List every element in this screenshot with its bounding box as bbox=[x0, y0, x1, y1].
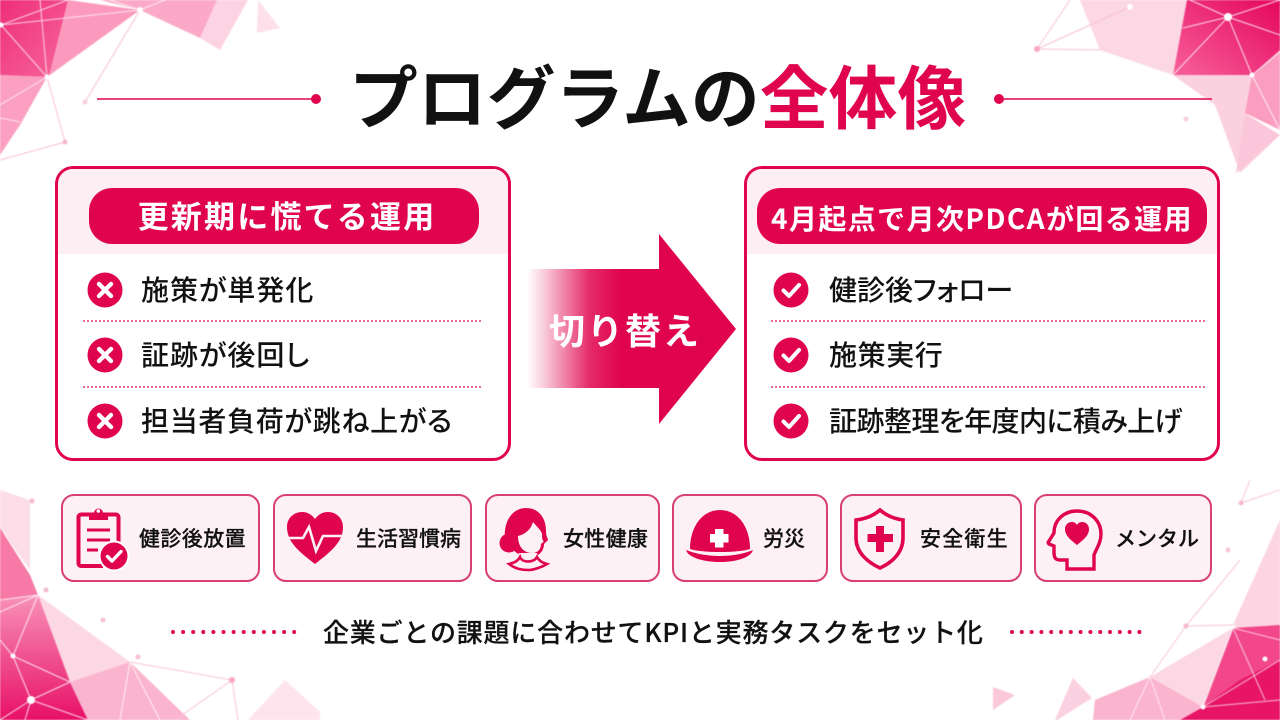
heading: before: 更新期に慌てる運用 bbox=[138, 200, 436, 235]
item: 健診後フォロー bbox=[774, 272, 1013, 308]
icon: hard hat bbox=[686, 510, 753, 562]
panel: before bbox=[55, 166, 511, 461]
arrow label: 切り替え bbox=[549, 311, 701, 352]
label: メンタル: メンタル bbox=[1115, 528, 1199, 551]
label: 労災: 労災 bbox=[763, 528, 805, 551]
icon: heart with pulse bbox=[287, 512, 343, 564]
card: メンタル bbox=[1034, 494, 1212, 582]
title rule: left bbox=[97, 94, 321, 104]
card: 生活習慣病 bbox=[273, 494, 472, 582]
item: 施策が単発化 bbox=[88, 272, 314, 308]
item: 施策が単発化: 施策が単発化 bbox=[141, 275, 314, 306]
card: 労災 bbox=[672, 494, 828, 582]
dotted rule: left bbox=[171, 630, 296, 634]
footer text: 企業ごとの課題に合わせてKPIと実務タスクをセット化 bbox=[323, 613, 984, 650]
panel: after bbox=[744, 166, 1220, 461]
icon: head with heart bbox=[1046, 509, 1103, 571]
item: 健診後フォロー: 健診後フォロー bbox=[829, 275, 1013, 306]
label: 女性健康: 女性健康 bbox=[563, 528, 648, 551]
heading: after: 4月起点で月次PDCAが回る運用 bbox=[771, 198, 1193, 238]
icon: woman bbox=[500, 508, 550, 572]
label: 生活習慣病: 生活習慣病 bbox=[356, 528, 461, 551]
item: 証跡が後回し bbox=[88, 338, 310, 372]
card: 安全衛生 bbox=[840, 494, 1022, 582]
heading: before bbox=[89, 188, 479, 244]
card: 女性健康 bbox=[485, 494, 660, 582]
dotted rule: right bbox=[1010, 630, 1142, 634]
card: 健診後放置 bbox=[61, 494, 260, 582]
item: 施策実行: 施策実行 bbox=[829, 340, 943, 371]
label: 健診後放置: 健診後放置 bbox=[139, 528, 246, 551]
icon: shield with cross bbox=[854, 508, 905, 570]
icon: clipboard check bbox=[76, 508, 130, 572]
arrow: switch bbox=[530, 234, 736, 424]
item: 施策実行 bbox=[774, 338, 943, 372]
title: プログラムの全体像 bbox=[349, 61, 966, 138]
item: 証跡整理を年度内に積み上げ: 証跡整理を年度内に積み上げ bbox=[829, 406, 1182, 437]
item: 担当者負荷が跳ね上がる: 担当者負荷が跳ね上がる bbox=[141, 406, 453, 437]
title rule: right bbox=[994, 94, 1212, 104]
item: 証跡が後回し: 証跡が後回し bbox=[141, 340, 310, 371]
label: 安全衛生: 安全衛生 bbox=[920, 528, 1009, 551]
heading: after bbox=[757, 188, 1207, 244]
